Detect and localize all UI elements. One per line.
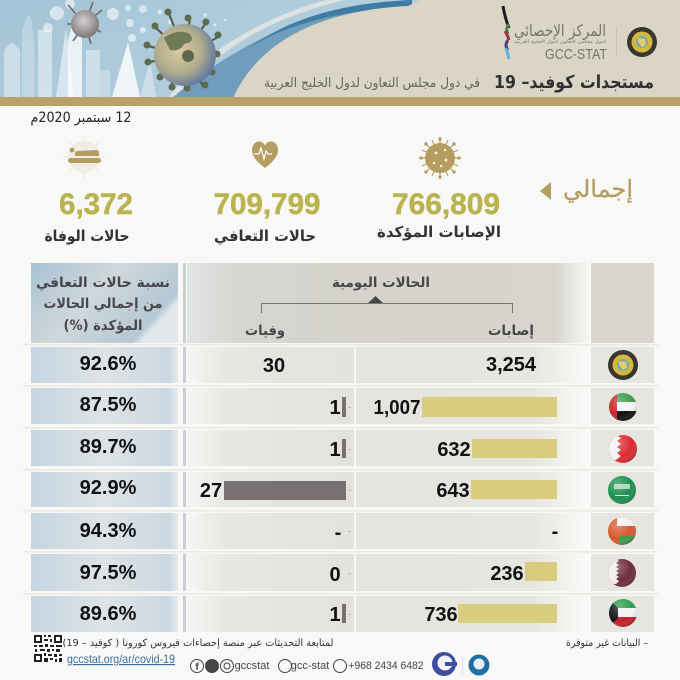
- swoosh cream: [168, 0, 345, 98]
- row: Qatar: 236: [490, 563, 524, 585]
- heading: cases: إصابات: [488, 323, 534, 339]
- heading: daily cases: الحالات اليومية: [332, 275, 430, 291]
- header subtitle: في دول مجلس التعاون لدول الخليج العربية: [264, 76, 480, 91]
- row: GCC total: 3,254: [486, 354, 537, 376]
- icon: UAE flag: [609, 393, 637, 421]
- row: UAE: [31, 388, 654, 424]
- row: Bahrain: 632: [437, 439, 471, 461]
- stat: recoveries: [214, 141, 320, 245]
- grey virus illustration: [67, 2, 102, 44]
- row: Oman: -: [552, 521, 558, 543]
- heading: recovery ratio: نسبة حالات التعافي: [36, 275, 170, 291]
- row: Saudi Arabia: 92.9%: [80, 477, 137, 499]
- phone number: +968 2434 6482: [348, 660, 424, 672]
- row: Bahrain: 1: [329, 439, 341, 461]
- stat: confirmed cases: 766,809: [392, 188, 500, 221]
- row: Kuwait: 1: [329, 604, 341, 626]
- stat: deaths: 6,372: [59, 188, 133, 221]
- footer: [34, 635, 648, 676]
- table: [23, 263, 658, 632]
- icon: Kuwait flag: [609, 599, 637, 627]
- row: Saudi Arabia: 27: [200, 480, 222, 502]
- social icons: [190, 660, 346, 672]
- row: Qatar: [31, 554, 654, 591]
- follow-up note: لمتابعة التحديثات عبر منصة إحصاءات فيروس كورونا ( كوفيد – 19): [62, 638, 334, 649]
- globe virus illustration: [144, 8, 222, 92]
- heading: deaths: وفيات: [245, 323, 285, 339]
- row: Oman: 94.3%: [80, 520, 137, 542]
- logo wordmark: المركز الإحصائي: [514, 21, 606, 41]
- row: Qatar: 0: [329, 564, 341, 586]
- header title: مستجدات كوفيد– 19: [494, 72, 654, 93]
- row: UAE: 87.5%: [80, 394, 137, 416]
- icon: patient in bed: [62, 135, 106, 179]
- bracket: [262, 296, 512, 313]
- handle: gcc-stat: gcc-stat: [291, 660, 329, 672]
- table header: [31, 263, 654, 343]
- row: Bahrain: [31, 430, 654, 466]
- note: data not available: – البيانات غير متوفرة: [566, 638, 648, 649]
- icon: virus: [419, 137, 461, 179]
- logo wordmark: [514, 21, 607, 63]
- logo: TUV: [468, 654, 490, 676]
- stat: recoveries: حالات التعافي: [214, 227, 316, 245]
- heading: recovery ratio: من إجمالي الحالات: [44, 296, 162, 312]
- facebook glyph: f: [195, 662, 199, 673]
- QR code: [34, 635, 62, 662]
- row: Saudi Arabia: 643: [436, 480, 470, 502]
- swoosh blue: [172, 0, 412, 98]
- stat: confirmed cases: الإصابات المؤكدة: [377, 223, 501, 241]
- icon: Saudi flag: [608, 476, 636, 504]
- row: UAE: 1: [329, 397, 341, 419]
- beige panel: [233, 0, 680, 98]
- heading: recovery ratio: المؤكدة (%): [64, 318, 142, 334]
- skyline illustration: [4, 10, 156, 97]
- arrow: total: [540, 182, 551, 200]
- stat: deaths: حالات الوفاة: [44, 227, 130, 245]
- row: Saudi Arabia: [31, 472, 654, 507]
- logo wordmark: GCC-STAT: [545, 47, 607, 63]
- row: Oman: [31, 513, 654, 549]
- heading: recovery ratio: [36, 275, 170, 334]
- row: Kuwait: 736: [424, 604, 458, 626]
- row: Bahrain: 89.7%: [80, 436, 137, 458]
- logo wordmark: لدول مجلس التعاون لدول الخليج العربية: [514, 40, 606, 45]
- handle: gccstat: gccstat: [235, 660, 269, 672]
- stat: recoveries: 709,799: [214, 188, 320, 221]
- gold band: [0, 97, 680, 106]
- stat: confirmed cases: [377, 137, 501, 241]
- header banner: [0, 0, 680, 106]
- row: Kuwait: [31, 596, 654, 632]
- link: gccstat.org/ar/covid-19: [67, 652, 175, 666]
- row: Kuwait: 89.6%: [80, 603, 137, 625]
- row: GCC total: 30: [263, 355, 285, 377]
- heading: total: إجمالي: [563, 175, 633, 204]
- row: Qatar: 97.5%: [80, 562, 137, 584]
- stat: deaths: [44, 135, 133, 245]
- row: Oman: -: [335, 522, 341, 544]
- icon: GCC emblem: [608, 350, 638, 380]
- logo ribbon: [503, 6, 509, 59]
- row: GCC total: [31, 347, 654, 383]
- icon: Oman flag: [608, 517, 636, 545]
- icon: Bahrain flag: [609, 435, 637, 463]
- GCC emblem: [627, 27, 657, 57]
- date: 12 سبتمبر 2020م: [30, 110, 132, 126]
- row: GCC total: 92.6%: [80, 353, 137, 375]
- decorative dots: [43, 0, 226, 42]
- row: UAE: 1,007: [374, 397, 420, 419]
- logo: G mark: [432, 652, 457, 676]
- icon: Qatar flag: [608, 559, 636, 587]
- icon: heart: [252, 141, 278, 168]
